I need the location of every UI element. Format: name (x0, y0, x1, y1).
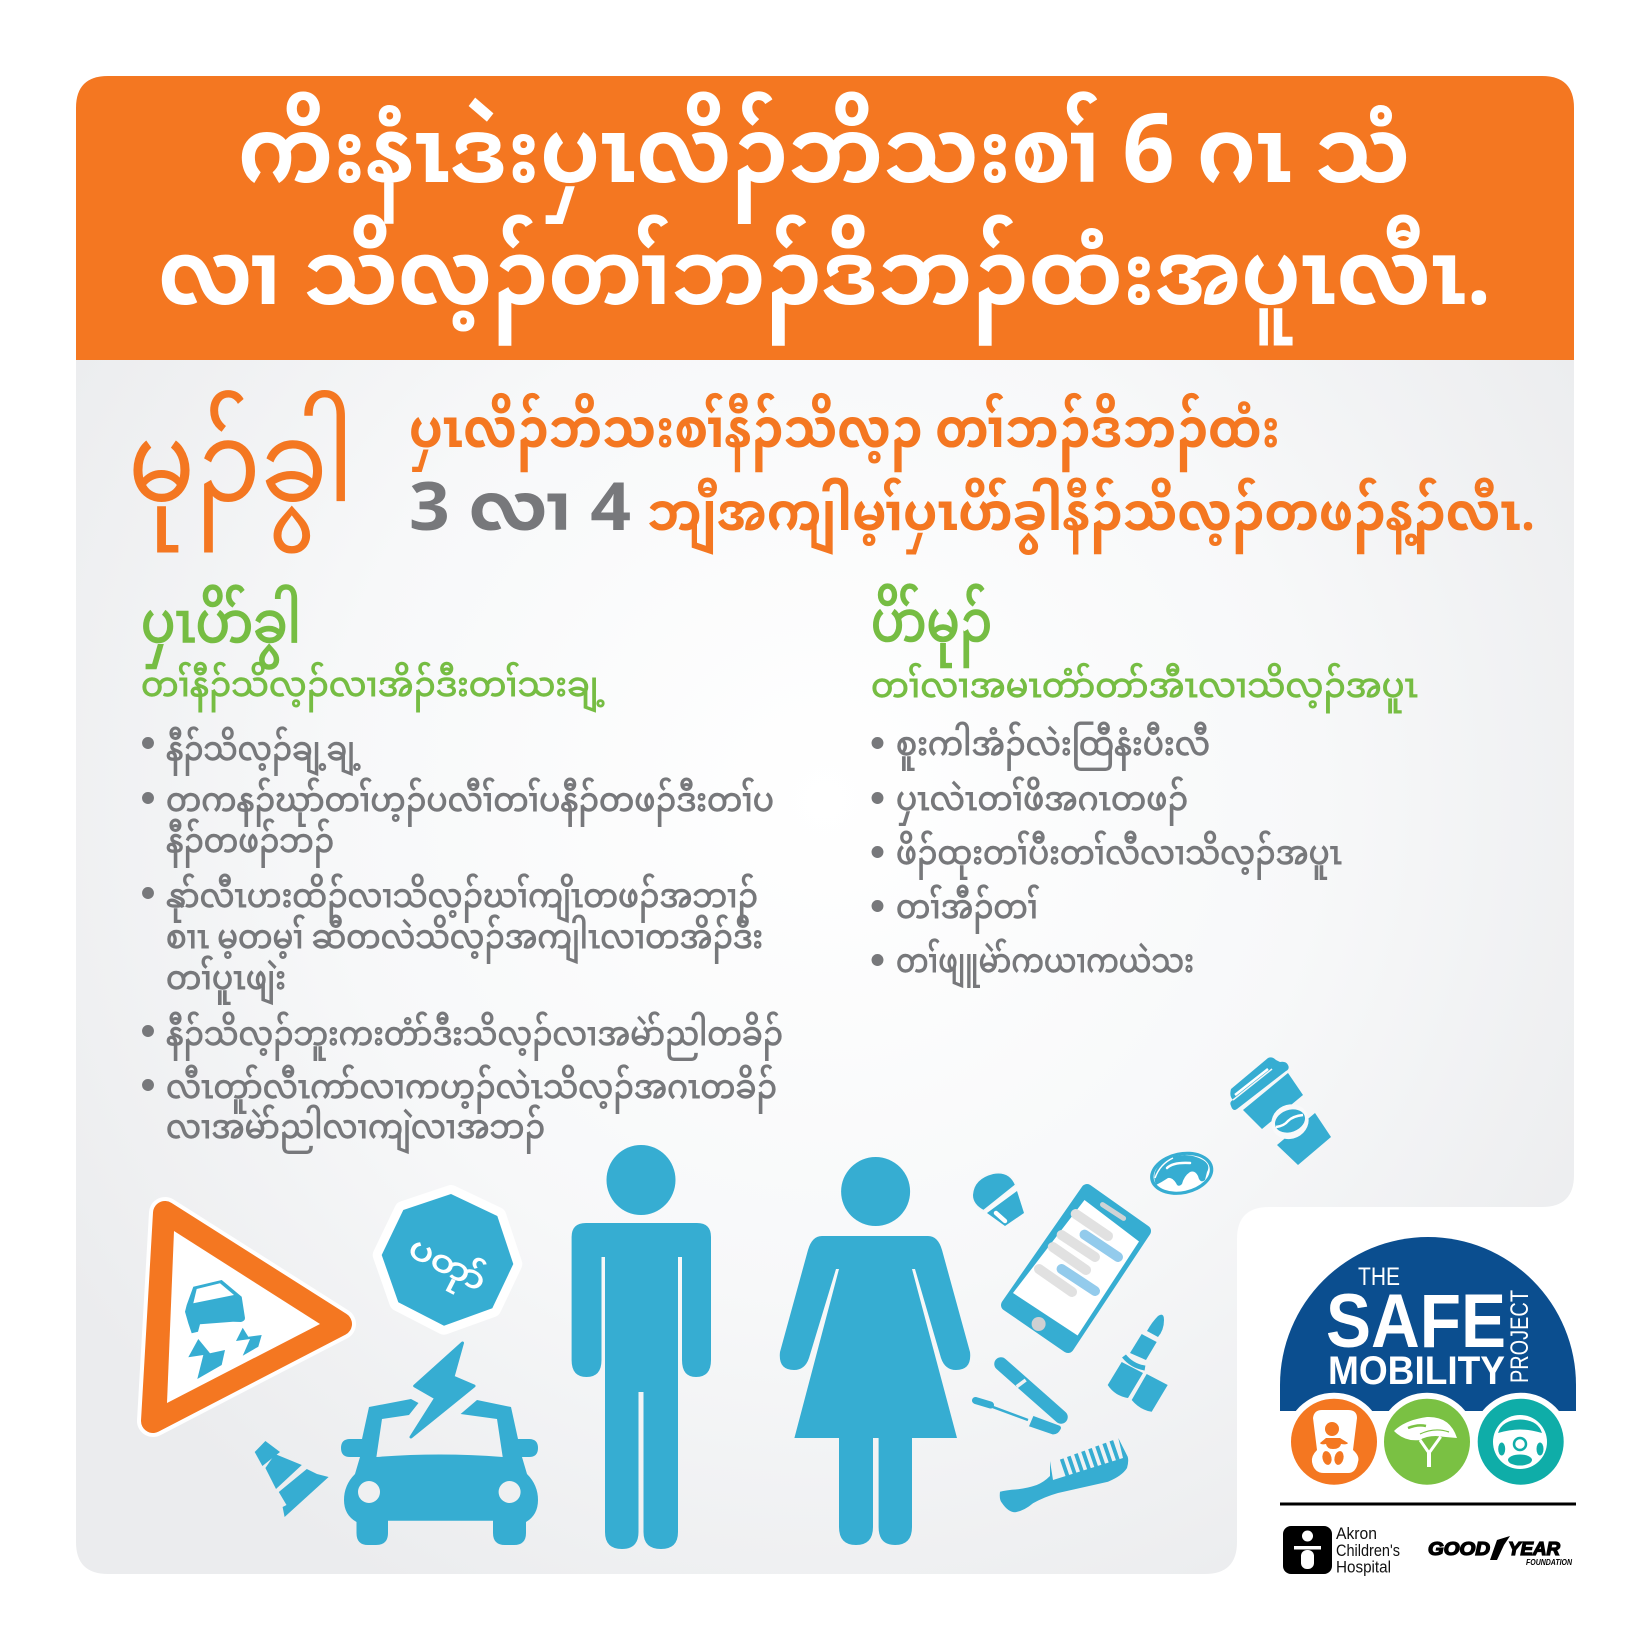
icon: slippery road warning triangle (153, 1213, 340, 1421)
bullet list: တကနၣ်ဃုာ်တၢ်ဟ့ၣ်ပလီၢ်တၢ်ပနီၣ်တဖၣ်ဒီးတၢ်ပ (166, 768, 774, 840)
logo dome (1280, 1237, 1576, 1411)
bullet list: စူးကါအံၣ်လဲးထြီနံးပီးလီ (896, 712, 1210, 784)
statistic statement: 3 လၢ 4 (409, 443, 631, 587)
title: လၢ သိလ့ၣ်တၢ်ဘၣ်ဒိဘၣ်ထံးအပူၤလီၤ. (158, 186, 1491, 381)
logo: The Safe Mobility Project (1280, 1237, 1576, 1506)
statistic statement: ပှၤလိၣ်ဘိသးစၢ်နီၣ်သိလ့ၣ တၢ်ဘၣ်ဒိဘၣ်ထံး (409, 377, 1280, 494)
column heading: ပှၤပိာ်ခွါ (141, 568, 301, 692)
icon: lipstick (1108, 1315, 1168, 1412)
icon: donut (1146, 1146, 1217, 1200)
bullet list: လီၤတူာ်လီၤကာ်လၢကဟ့ၣ်လဲၤသိလ့ၣ်အဂၤတခိၣ် (166, 1055, 777, 1127)
column: distracted driving (871, 567, 1418, 1001)
icon: crashed car (341, 1399, 538, 1545)
logo: Akron Children's Hospital (1283, 1524, 1400, 1577)
icon: stop sign (382, 1194, 513, 1326)
bullet list: လၢအမဲာ်ညါလၢကျဲလၢအဘၣ် (166, 1095, 545, 1167)
panel: orange title banner (76, 76, 1574, 360)
bullet list: တၢ်ပူၤဖျဲး (166, 946, 286, 1018)
logo: Goodyear Foundation: GOOD (1428, 1539, 1490, 1559)
logo icon: helmet (1378, 1393, 1476, 1491)
icon: stop sign: ပတုာ် (395, 1219, 498, 1315)
logo: Akron Children's Hospital: Akron (1336, 1524, 1377, 1543)
logo wordmark: PROJECT (1506, 1290, 1534, 1383)
icon: coffee cup (1230, 1057, 1331, 1165)
column subheading: တၢ်လၢအမၤတံာ်တာ်အီၤလၢသိလ့ၣ်အပူၤ (871, 653, 1418, 727)
logo: Akron Children's Hospital: Hospital (1336, 1558, 1391, 1577)
logo: Goodyear Foundation (1428, 1536, 1573, 1567)
logo wordmark: THE (1358, 1263, 1400, 1291)
icon: comb (1000, 1438, 1128, 1512)
title (158, 55, 1491, 381)
icon: woman figure (780, 1157, 970, 1545)
icon: smartphone (1007, 1190, 1145, 1347)
logo: Goodyear Foundation: FOUNDATION (1526, 1557, 1573, 1567)
icon: mascara (976, 1364, 1062, 1435)
statistic statement (409, 377, 1535, 587)
bullet list: စၢၤ မ့တမ့ၢ် ဆီတလဲသိလ့ၣ်အကျါၤလၢတအိၣ်ဒီး (166, 905, 763, 977)
bullet list: တၢ်ဖျူမဲာ်ကယၢကယဲသး (896, 929, 1194, 1001)
logo: Akron Children's Hospital: Children's (1336, 1541, 1400, 1560)
bullet list: နီၣ်သိလ့ၣ်ဘူးကးတံာ်ဒီးသိလ့ၣ်လၢအမဲာ်ညါတခိၣ် (166, 1002, 783, 1074)
bullet list: တၢ်အီၣ်တၢ် (896, 875, 1040, 947)
logo divider (1280, 1502, 1576, 1506)
logo: Goodyear Foundation: YEAR (1508, 1539, 1560, 1559)
logo icon: steering wheel (1472, 1393, 1570, 1491)
bullet list: နီၣ်သိလ့ၣ်ချ့ချ့ (166, 717, 361, 789)
bullet list: နီၣ်တဖၣ်ဘၣ် (166, 809, 334, 881)
bullet list (142, 717, 783, 1167)
bullet list (872, 712, 1342, 1001)
column heading: ပိာ်မုၣ် (871, 567, 992, 691)
heading: men: မုၣ်ခွါ (128, 355, 354, 597)
icon: man figure (572, 1145, 711, 1549)
icon: lightning bolt (411, 1343, 474, 1437)
icon: traffic cone (255, 1441, 329, 1517)
icon: muffin (972, 1172, 1024, 1226)
bullet list: ပှၤလဲၤတၢ်ဖိအဂၤတဖၣ် (896, 767, 1188, 839)
logo wordmark: SAFE (1326, 1279, 1506, 1364)
column: risky driving (141, 568, 783, 1167)
bullet list: နုာ်လီၤဟးထိၣ်လၢသိလ့ၣ်ဃၢ်ကျိၤတဖၣ်အဘၢၣ် (166, 864, 758, 936)
logo wordmark: MOBILITY (1328, 1349, 1505, 1393)
column subheading: တၢ်နီၣ်သိလ့ၣ်လၢအိၣ်ဒီးတၢ်သးချ့ (141, 652, 605, 726)
logo icon: child seat (1285, 1393, 1383, 1491)
title: ကိးနံၤဒဲးပှၤလိၣ်ဘိသးစၢ် 6 ဂၤ သံ (238, 55, 1410, 265)
bullet list: ဖိၣ်ထုးတၢ်ပီးတၢ်လီလၢသိလ့ၣ်အပူၤ (896, 821, 1342, 893)
statistic statement: ဘျီအကျါမ့ၢ်ပှၤပိာ်ခွါနီၣ်သိလ့ၣ်တဖၣ်န့ၣ်လီၤ. (647, 461, 1535, 575)
logo wordmark (1326, 1263, 1534, 1393)
